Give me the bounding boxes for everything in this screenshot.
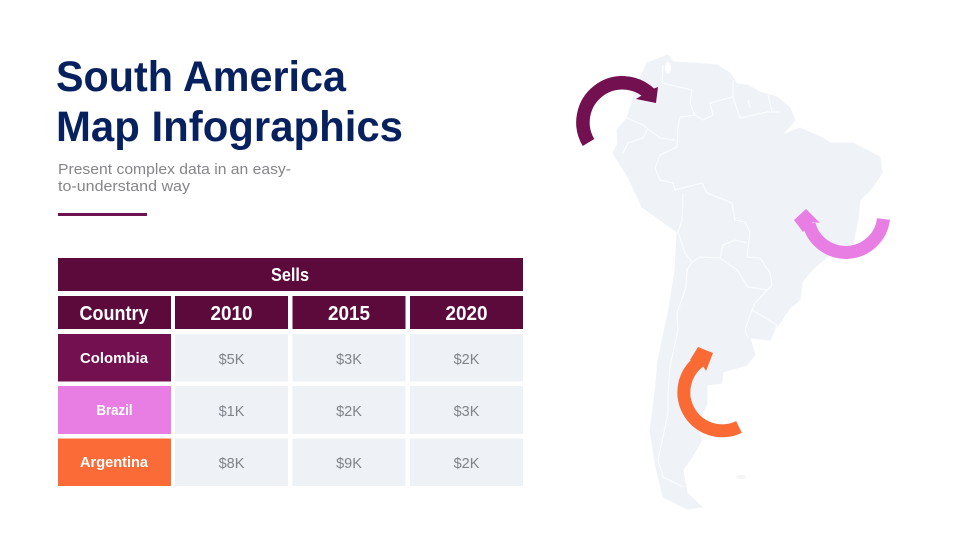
map: Falkland Islands — [736, 475, 746, 479]
row: Argentina: $8K — [219, 456, 245, 472]
title: South America — [56, 53, 347, 101]
row: Brazil: Brazil — [96, 402, 132, 419]
row: Colombia — [58, 334, 523, 382]
column headers: 2015 — [328, 303, 370, 325]
subtitle text: to-understand way — [58, 178, 191, 195]
row: Colombia: $2K — [454, 352, 480, 368]
row: Colombia: Colombia — [80, 350, 149, 367]
row: Brazil: $3K — [454, 404, 480, 420]
row: Argentina: $2K — [454, 456, 480, 472]
table: sells by country and year — [58, 258, 523, 486]
title: Map Infographics — [56, 103, 403, 151]
subtitle text — [58, 161, 291, 195]
column headers — [58, 296, 523, 329]
arrow: orange, Argentina — [684, 347, 739, 431]
map: South America — [613, 55, 882, 509]
accent line — [58, 213, 147, 216]
column headers: 2010 — [210, 303, 252, 325]
row: Argentina: $9K — [336, 456, 362, 472]
column headers: 2020 — [446, 303, 488, 325]
column headers: Country — [80, 303, 149, 325]
arrow: pink, Brazil — [794, 209, 884, 252]
title — [56, 53, 403, 151]
map: Lake Maracaibo — [665, 62, 671, 74]
row: Brazil: $2K — [336, 404, 362, 420]
row: Argentina: Argentina — [80, 454, 149, 471]
table header: Sells: Sells — [271, 265, 309, 285]
table header: Sells — [58, 258, 523, 291]
row: Colombia: $3K — [336, 352, 362, 368]
subtitle text: Present complex data in an easy- — [58, 161, 291, 178]
row: Brazil — [58, 386, 523, 434]
row: Brazil: $1K — [219, 404, 245, 420]
row: Argentina — [58, 438, 523, 486]
row: Colombia: $5K — [219, 352, 245, 368]
arrow: maroon, Colombia — [583, 83, 658, 142]
map: country borders — [623, 65, 780, 487]
